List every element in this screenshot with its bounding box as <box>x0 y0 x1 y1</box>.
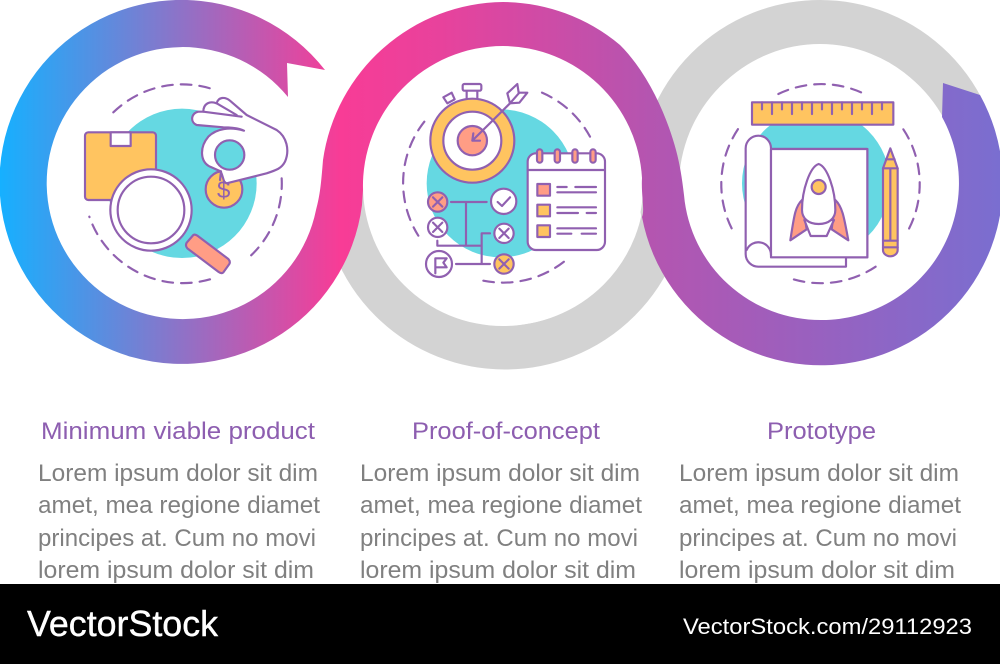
cardboard box <box>85 132 156 200</box>
heading: Minimum viable product <box>41 418 315 445</box>
magnifying glass <box>110 169 230 273</box>
body text: amet, mea regione diamet <box>679 492 961 519</box>
body text: Lorem ipsum dolor sit dim <box>679 460 959 487</box>
pencil <box>883 148 898 256</box>
dashed orbit <box>89 84 282 283</box>
body text: lorem ipsum dolor sit dim <box>360 557 636 584</box>
decision tree <box>426 189 516 277</box>
body text: Lorem ipsum dolor sit dim <box>360 460 640 487</box>
body text <box>38 460 320 584</box>
blueprint scroll <box>746 136 867 267</box>
body text: principes at. Cum no movi <box>38 525 316 552</box>
column: proof-of-concept <box>360 418 642 584</box>
arrow <box>472 84 527 141</box>
body text: lorem ipsum dolor sit dim <box>38 557 314 584</box>
icon: prototype <box>721 84 920 283</box>
coin: $ <box>217 177 230 204</box>
body text <box>679 460 961 584</box>
dashed orbit <box>721 84 920 283</box>
body text: Lorem ipsum dolor sit dim <box>38 460 318 487</box>
heading: Prototype <box>767 418 876 445</box>
coin <box>206 171 242 208</box>
teal backdrop circle <box>427 109 575 257</box>
body text: lorem ipsum dolor sit dim <box>679 557 955 584</box>
teal backdrop circle <box>107 109 257 258</box>
hand <box>192 98 287 183</box>
body text: amet, mea regione diamet <box>360 492 642 519</box>
heading: Proof-of-concept <box>412 418 600 445</box>
body text: principes at. Cum no movi <box>360 525 638 552</box>
column: minimum viable product <box>38 418 320 584</box>
gradient ribbon connecting the three steps <box>0 0 1000 365</box>
body text: principes at. Cum no movi <box>679 525 957 552</box>
grey background rings <box>344 22 980 348</box>
teal backdrop circle <box>742 109 890 257</box>
footer logo: VectorStock <box>27 603 219 644</box>
icon: minimum viable product <box>85 84 287 283</box>
body text: amet, mea regione diamet <box>38 492 320 519</box>
footer url: VectorStock.com/29112923 <box>683 614 972 639</box>
body text <box>360 460 642 584</box>
stopwatch target <box>430 84 514 183</box>
icon: proof-of-concept <box>403 84 605 283</box>
white circle discs <box>45 45 961 327</box>
dashed orbit <box>403 93 590 283</box>
rocket <box>790 164 848 240</box>
footer bar <box>0 584 1000 664</box>
ruler <box>752 102 893 125</box>
column: prototype <box>679 418 961 584</box>
calendar checklist <box>528 149 605 250</box>
